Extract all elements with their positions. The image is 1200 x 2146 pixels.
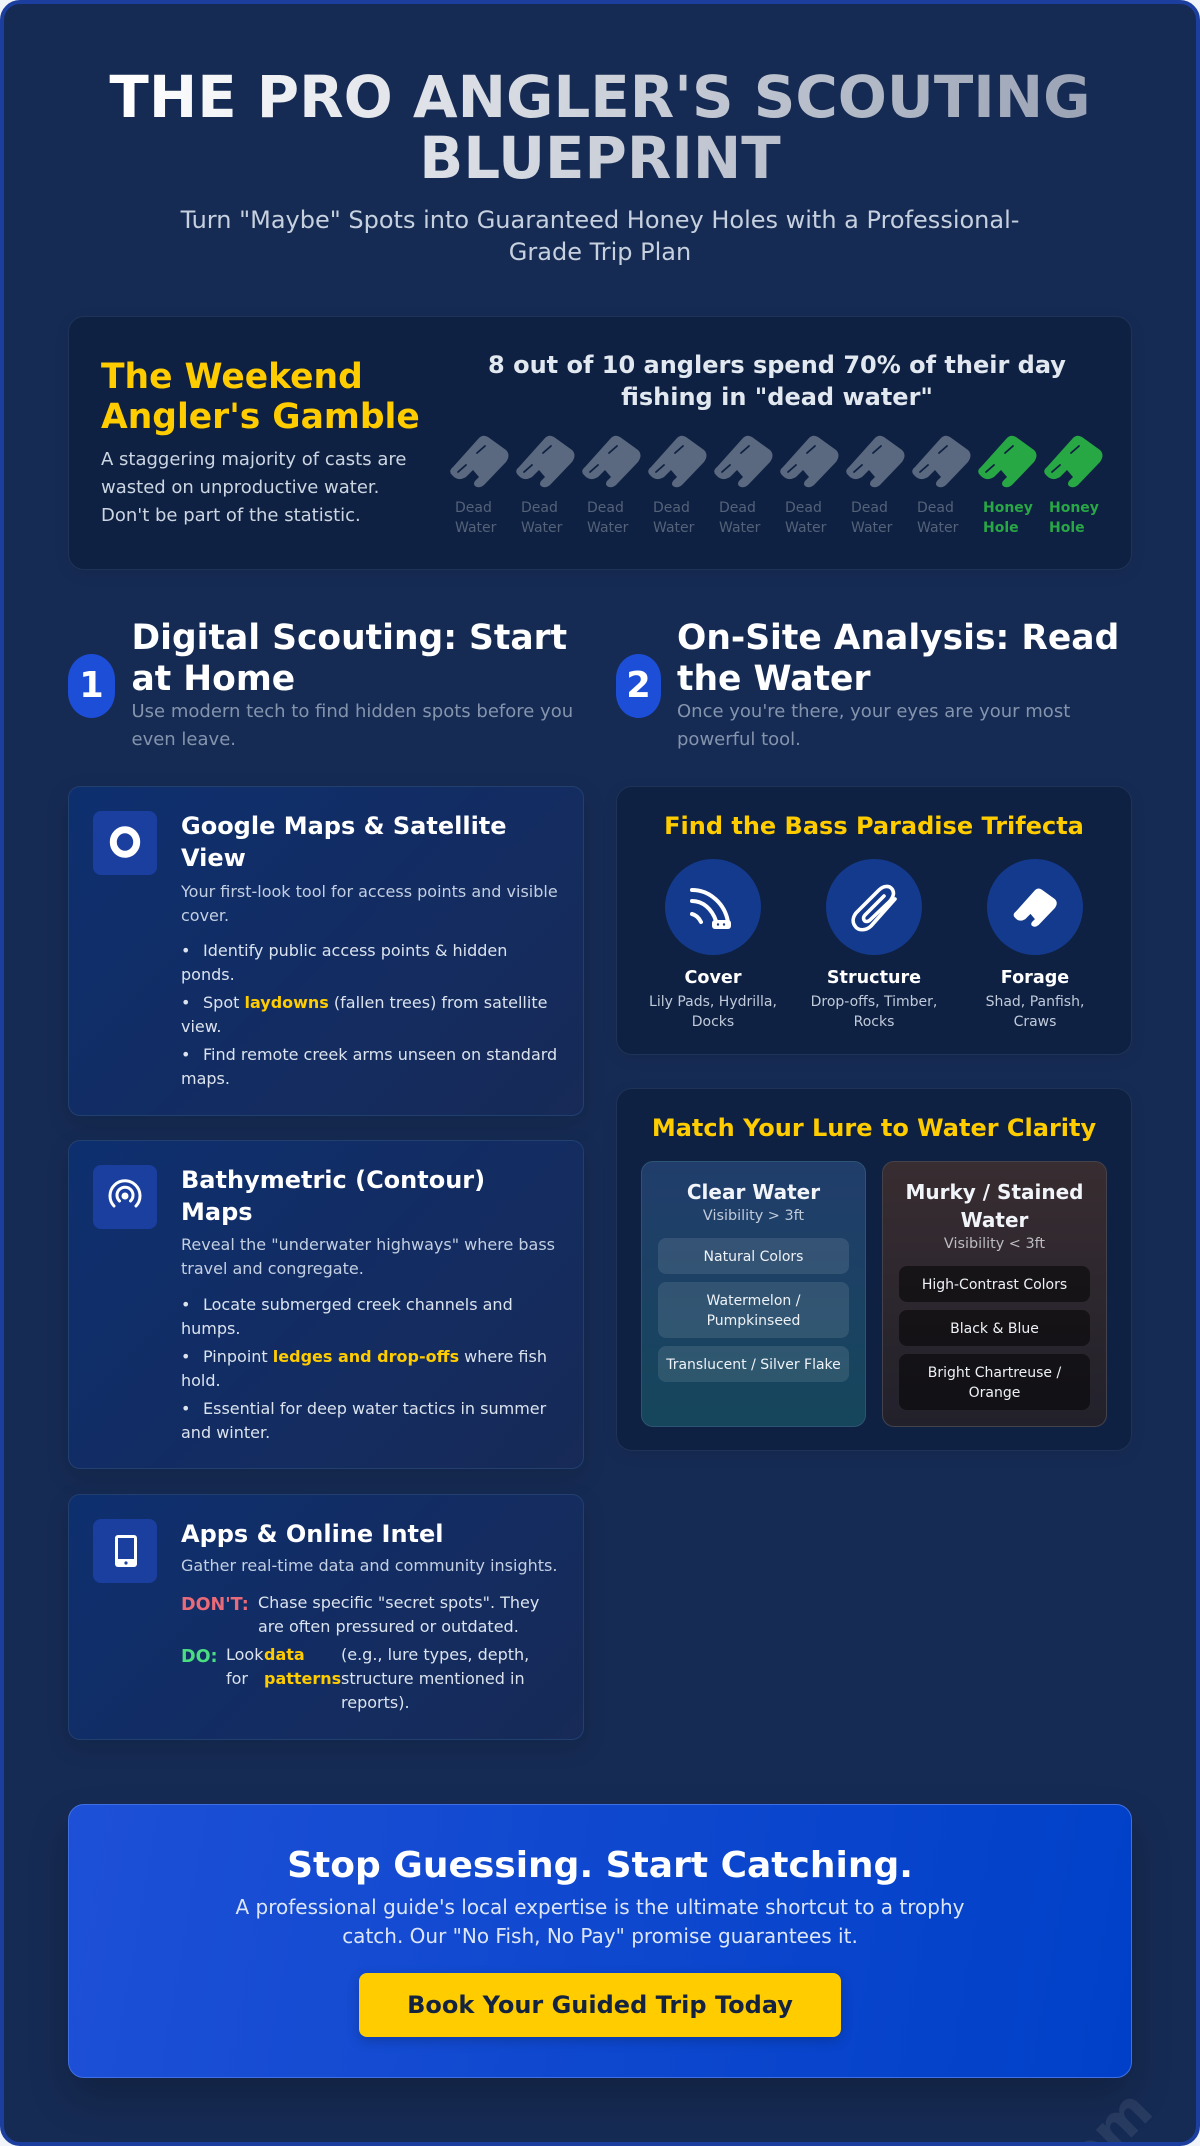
- card title: [181, 812, 507, 872]
- statistic headline: [488, 351, 1066, 410]
- chip: High-Contrast Colors: [922, 1276, 1067, 1292]
- pictogram label: honey hole 2: Honey: [1049, 500, 1099, 516]
- subtitle: Turn "Maybe" Spots into Guaranteed Honey Holes with a Professional-: [181, 206, 1019, 234]
- trifecta label: forage: Forage: [1001, 968, 1069, 988]
- bullet: laydowns: Spot laydowns (fallen trees) from satellite: [203, 993, 547, 1012]
- card description: Reveal the "underwater highways" where bass: [181, 1235, 555, 1254]
- pictogram label: dead water 3: Water: [587, 520, 628, 536]
- gamble description: Don't be part of the statistic.: [101, 504, 361, 526]
- subpanel: clear water: [641, 1161, 866, 1427]
- do label: DO:: [181, 1647, 218, 1667]
- pictogram label: dead water 5: Dead: [719, 500, 756, 516]
- panel: bass paradise trifecta: [616, 786, 1132, 1055]
- pictogram label: dead water 4: [653, 500, 694, 536]
- pictogram label: dead water 4: Water: [653, 520, 694, 536]
- bullet: creek channels: •: [181, 1295, 190, 1314]
- bullet: ledges: hold.: [181, 1371, 221, 1390]
- step 1 badge: [68, 654, 115, 718]
- icon: forage: [987, 859, 1083, 955]
- gamble heading: The Weekend: [101, 357, 363, 397]
- bullet: deep water: Essential for deep water tactics in summer: [203, 1399, 546, 1418]
- chip: Black & Blue: [950, 1320, 1039, 1336]
- trifecta text: structure: [811, 994, 937, 1030]
- icon: cover: [665, 859, 761, 955]
- panel: match your lure: [616, 1088, 1132, 1451]
- bullet: creek arms: Find remote creek arms unseen on standard: [203, 1045, 557, 1064]
- trifecta text: structure: Drop-offs, Timber,: [811, 994, 937, 1010]
- bullet: creek arms: [181, 1045, 557, 1088]
- do highlight: data: [264, 1645, 305, 1664]
- gamble heading: [101, 357, 420, 437]
- step 2 heading: On-Site Analysis: Read: [677, 618, 1119, 658]
- pictogram label: dead water 3: [587, 500, 628, 536]
- chip: Translucent / Silver Flake: [666, 1356, 841, 1372]
- trifecta heading: Find the Bass Paradise Trifecta: [664, 812, 1084, 840]
- step 1 heading: [132, 618, 567, 698]
- pictogram label: dead water 7: [851, 500, 892, 536]
- do text: for: [226, 1669, 248, 1688]
- gamble description: [101, 448, 406, 526]
- chip: [899, 1266, 1090, 1302]
- clear water visibility: Visibility > 3ft: [703, 1208, 804, 1224]
- pictogram label: honey hole 1: [983, 500, 1033, 536]
- bullet: deep water: [181, 1399, 546, 1442]
- bullet: laydowns: •: [181, 993, 190, 1012]
- card description: Your first-look tool for access points and visible: [181, 882, 558, 901]
- trifecta label: structure: Structure: [827, 968, 921, 988]
- cta text: catch. Our "No Fish, No Pay" promise guarantees it.: [342, 1924, 858, 1948]
- panel: weekend angler's gamble: [68, 316, 1132, 570]
- pictogram label: dead water 1: Dead: [455, 500, 492, 516]
- pictogram label: dead water 8: Dead: [917, 500, 954, 516]
- statistic headline: fishing in "dead water": [621, 382, 933, 410]
- pictogram label: dead water 2: Water: [521, 520, 562, 536]
- clear water title: Clear Water: [687, 1180, 820, 1204]
- card description: [181, 1235, 555, 1278]
- pictogram label: dead water 1: Water: [455, 520, 496, 536]
- step 1 badge: 1: [79, 665, 104, 706]
- pictogram label: dead water 2: Dead: [521, 500, 558, 516]
- bullet: public access: Identify public access points & hidden: [203, 941, 507, 960]
- cta text: [235, 1895, 964, 1948]
- bullet: public access: ponds.: [181, 965, 235, 984]
- chip: [658, 1346, 849, 1382]
- icon: map pin ring: [93, 811, 157, 875]
- card description: cover.: [181, 906, 229, 925]
- do highlight: [264, 1645, 341, 1688]
- pictogram label: honey hole 2: Hole: [1049, 520, 1085, 536]
- gamble description: A staggering majority of casts are: [101, 448, 406, 470]
- bullet: creek arms: •: [181, 1045, 190, 1064]
- pictogram label: dead water 1: [455, 500, 496, 536]
- card title: Maps: [181, 1198, 253, 1226]
- bullet: laydowns: view.: [181, 1017, 221, 1036]
- pictogram label: dead water 5: [719, 500, 760, 536]
- chip: [899, 1354, 1090, 1410]
- bullet list: [181, 941, 557, 1088]
- chip: [658, 1238, 849, 1274]
- pictogram label: honey hole 1: Hole: [983, 520, 1019, 536]
- step 2 badge: 2: [626, 665, 651, 706]
- card title: View: [181, 844, 246, 872]
- step 2 subheading: [677, 701, 1070, 750]
- bullet: public access: •: [181, 941, 190, 960]
- panel: apps and online intel: [68, 1494, 584, 1740]
- step 1 heading: at Home: [132, 658, 295, 698]
- chip: Bright Chartreuse /: [928, 1364, 1061, 1380]
- step 2 heading: the Water: [677, 658, 870, 698]
- chip: Natural Colors: [704, 1248, 803, 1264]
- card title: Google Maps & Satellite: [181, 812, 507, 840]
- step 1 heading: Digital Scouting: Start: [132, 618, 567, 658]
- trifecta text: cover: Lily Pads, Hydrilla,: [649, 994, 777, 1010]
- step 2 subheading: powerful tool.: [677, 729, 801, 750]
- trifecta text: structure: Rocks: [854, 1014, 894, 1030]
- trifecta text: cover: Docks: [692, 1014, 734, 1030]
- don't text: [258, 1593, 539, 1636]
- pictogram label: honey hole 2: [1049, 500, 1099, 536]
- don't text: are often pressured or outdated.: [258, 1617, 519, 1636]
- do text: [226, 1645, 264, 1688]
- trifecta label: cover: Cover: [684, 968, 742, 988]
- bullet: creek channels: [181, 1295, 513, 1338]
- step 2 heading: [677, 618, 1119, 698]
- do highlight: patterns: [264, 1669, 341, 1688]
- icon: tablet: [93, 1519, 157, 1583]
- pictogram label: dead water 5: Water: [719, 520, 760, 536]
- bullet: creek channels: humps.: [181, 1319, 240, 1338]
- title: THE PRO ANGLER'S SCOUTING: [109, 63, 1091, 131]
- title: [0, 67, 1200, 189]
- bullet: ledges: [181, 1347, 547, 1390]
- title: BLUEPRINT: [419, 124, 781, 192]
- chip: Watermelon /: [707, 1292, 800, 1308]
- panel: google maps and satellite view: [68, 786, 584, 1116]
- statistic headline: 8 out of 10 anglers spend 70% of their day: [488, 351, 1066, 379]
- cta button: Book Your Guided Trip Today: [407, 1991, 793, 2019]
- chip: Orange: [969, 1384, 1020, 1400]
- do detail: reports).: [341, 1693, 410, 1712]
- pictogram label: dead water 6: Water: [785, 520, 826, 536]
- step 1 subheading: Use modern tech to find hidden spots before you: [132, 701, 573, 722]
- pictogram label: dead water 3: Dead: [587, 500, 624, 516]
- bullet: deep water: and winter.: [181, 1423, 270, 1442]
- panel: bathymetric contour maps: [68, 1140, 584, 1469]
- cta heading: Stop Guessing. Start Catching.: [287, 1845, 913, 1886]
- card description: [181, 882, 558, 925]
- pictogram label: dead water 8: Water: [917, 520, 958, 536]
- subpanel: murky stained water: [882, 1161, 1107, 1427]
- don't label: DON'T:: [181, 1595, 249, 1615]
- pictogram label: dead water 8: [917, 500, 958, 536]
- do detail: [341, 1645, 529, 1712]
- panel: call to action: [68, 1804, 1132, 2078]
- murky water title: [905, 1180, 1084, 1232]
- icon: contour rings: [93, 1165, 157, 1229]
- murky water visibility: Visibility < 3ft: [944, 1236, 1045, 1252]
- icon: structure paperclip: [826, 859, 922, 955]
- pictogram label: honey hole 1: Honey: [983, 500, 1033, 516]
- bullet: laydowns: [181, 993, 547, 1036]
- trifecta text: forage: [986, 994, 1084, 1030]
- card title: Apps & Online Intel: [181, 1520, 444, 1548]
- subtitle: Grade Trip Plan: [509, 238, 691, 266]
- pictogram label: dead water 2: [521, 500, 562, 536]
- trifecta text: forage: Shad, Panfish,: [986, 994, 1084, 1010]
- step 1 subheading: even leave.: [132, 729, 236, 750]
- chip: [899, 1310, 1090, 1346]
- pictogram label: dead water 7: Water: [851, 520, 892, 536]
- do text: Look: [226, 1645, 263, 1664]
- step 2 badge: [616, 654, 661, 718]
- don't text: Chase specific "secret spots". They: [258, 1593, 539, 1612]
- pictogram row: 8 dead water, 2 honey holes: [450, 436, 1102, 488]
- bullet: ledges: Pinpoint ledges and drop-offs where fish: [203, 1347, 547, 1366]
- card title: Bathymetric (Contour): [181, 1166, 485, 1194]
- trifecta text: cover: [649, 994, 777, 1030]
- murky water title: Murky / Stained: [905, 1180, 1084, 1204]
- card description: travel and congregate.: [181, 1259, 364, 1278]
- bullet list: [181, 1295, 547, 1442]
- trifecta text: forage: Craws: [1014, 1014, 1056, 1030]
- pictogram label: dead water 6: [785, 500, 826, 536]
- bullet: ledges: •: [181, 1347, 190, 1366]
- gamble description: wasted on unproductive water.: [101, 476, 379, 498]
- do detail: structure mentioned in: [341, 1669, 525, 1688]
- card title: [181, 1166, 485, 1226]
- bullet: public access: [181, 941, 507, 984]
- bullet: creek arms: maps.: [181, 1069, 230, 1088]
- step 2 subheading: Once you're there, your eyes are your most: [677, 701, 1070, 722]
- bullet: deep water: •: [181, 1399, 190, 1418]
- lure heading: Match Your Lure to Water Clarity: [652, 1114, 1096, 1142]
- pictogram label: dead water 4: Dead: [653, 500, 690, 516]
- pictogram label: dead water 7: Dead: [851, 500, 888, 516]
- pictogram label: dead water 6: Dead: [785, 500, 822, 516]
- chip: [658, 1282, 849, 1338]
- chip: Pumpkinseed: [707, 1312, 800, 1328]
- murky water title: Water: [961, 1208, 1028, 1232]
- bullet: creek channels: Locate submerged creek channels and: [203, 1295, 513, 1314]
- subtitle: [180, 206, 1019, 266]
- card description: Gather real-time data and community insights.: [181, 1556, 557, 1575]
- cta button: [359, 1973, 841, 2037]
- step 1 subheading: [132, 701, 573, 750]
- do detail: (e.g., lure types, depth,: [341, 1645, 529, 1664]
- cta text: A professional guide's local expertise is the ultimate shortcut to a trophy: [235, 1895, 964, 1919]
- gamble heading: Angler's Gamble: [101, 397, 420, 437]
